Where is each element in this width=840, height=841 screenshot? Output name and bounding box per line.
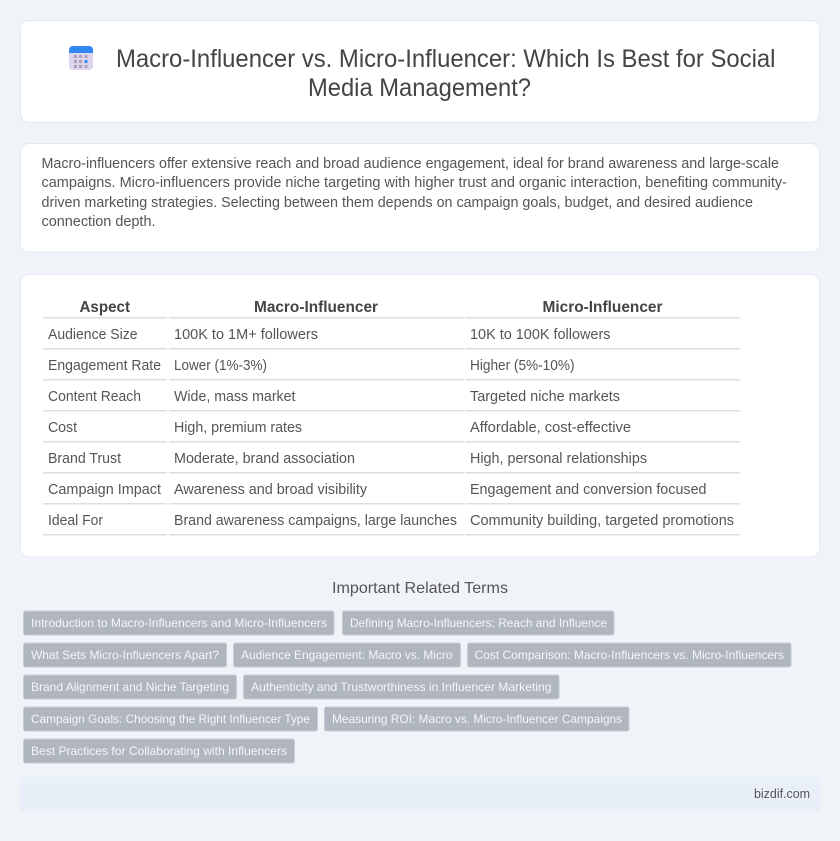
tag — [24, 643, 226, 667]
table row: engagement rate: Engagement Rate — [48, 358, 161, 374]
heading: important related terms: Important Related Terms — [332, 580, 508, 597]
text block: introduction paragraph: Macro-influencers offer extensive reach and broad audience engagement, ideal for brand awareness and large-scale — [42, 156, 779, 172]
table row: campaign impact: Engagement and conversion focused — [470, 482, 706, 498]
tag: Brand Alignment and Niche Targeting — [31, 680, 229, 694]
table row: engagement rate: Higher (5%-10%) — [470, 358, 574, 374]
table row: ideal for: Brand awareness campaigns, large launches — [174, 513, 457, 529]
text block: introduction paragraph: campaigns. Micro-influencers provide niche targeting with higher trust and organic interaction, benefiting community- — [42, 175, 787, 191]
table row: campaign impact: Campaign Impact — [48, 482, 161, 498]
table row: audience size: 100K to 1M+ followers — [174, 327, 318, 343]
related terms tags — [24, 611, 791, 763]
table row: engagement rate — [43, 358, 740, 380]
tag — [324, 707, 629, 731]
text block: introduction paragraph — [42, 156, 787, 230]
tag — [24, 611, 334, 635]
panel: introduction — [20, 144, 820, 252]
tag: What Sets Micro-Influencers Apart? — [31, 648, 219, 662]
text block: introduction paragraph: connection depth. — [42, 214, 156, 230]
table row: cost — [43, 420, 740, 442]
table row: content reach: Targeted niche markets — [470, 389, 620, 405]
table row: ideal for: Community building, targeted promotions — [470, 513, 734, 529]
table header row — [43, 299, 740, 318]
panel: title header — [20, 20, 820, 122]
table header row: Macro-Influencer — [254, 299, 378, 316]
table row: brand trust: Moderate, brand association — [174, 451, 355, 467]
table row: audience size — [43, 327, 740, 350]
table row: content reach: Wide, mass market — [174, 389, 296, 405]
title: Media Management? — [308, 74, 531, 102]
tag: Authenticity and Trustworthiness in Influencer Marketing — [251, 680, 552, 694]
tag: Defining Macro-Influencers: Reach and Influence — [350, 616, 607, 630]
tag — [342, 611, 614, 635]
tag: Audience Engagement: Macro vs. Micro — [241, 648, 453, 662]
tag: Measuring ROI: Macro vs. Micro-Influencer Campaigns — [332, 712, 622, 726]
table row: campaign impact — [43, 482, 740, 504]
footer — [20, 777, 820, 811]
table row: brand trust — [43, 451, 740, 474]
tag — [234, 643, 460, 667]
tag — [24, 707, 318, 731]
tag: Introduction to Macro-Influencers and Micro-Influencers — [31, 616, 327, 630]
footer source text: bizdif.com — [754, 786, 810, 801]
title — [116, 45, 776, 102]
panel: comparison table — [20, 274, 820, 557]
table row: campaign impact: Awareness and broad visibility — [174, 482, 368, 498]
table row: audience size: 10K to 100K followers — [470, 327, 610, 343]
tag: Cost Comparison: Macro-Influencers vs. Micro-Influencers — [474, 648, 784, 662]
table row: brand trust: High, personal relationships — [470, 451, 647, 467]
tag — [24, 675, 236, 699]
tag: Campaign Goals: Choosing the Right Influencer Type — [31, 712, 310, 726]
table row: engagement rate: Lower (1%-3%) — [174, 358, 267, 374]
table row: ideal for — [43, 513, 740, 536]
table row: ideal for: Ideal For — [48, 513, 103, 529]
icon: calendar — [69, 46, 93, 70]
tag — [24, 739, 294, 763]
title: Macro-Influencer vs. Micro-Influencer: Which Is Best for Social — [116, 45, 776, 73]
tag — [468, 643, 791, 667]
tag — [244, 675, 559, 699]
table row: cost: Affordable, cost-effective — [470, 420, 631, 436]
table row: cost: High, premium rates — [174, 420, 302, 436]
table header row: Micro-Influencer — [542, 299, 662, 316]
table row: audience size: Audience Size — [48, 327, 138, 343]
table header row: Aspect — [80, 299, 131, 316]
text block: introduction paragraph: driven marketing strategies. Selecting between them depends on campaign goals, budget, and desired audience — [42, 195, 753, 211]
table row: cost: Cost — [48, 420, 77, 436]
table row: brand trust: Brand Trust — [48, 451, 121, 467]
table row: content reach — [43, 389, 740, 412]
table row: content reach: Content Reach — [48, 389, 141, 405]
tag: Best Practices for Collaborating with Influencers — [31, 744, 287, 758]
